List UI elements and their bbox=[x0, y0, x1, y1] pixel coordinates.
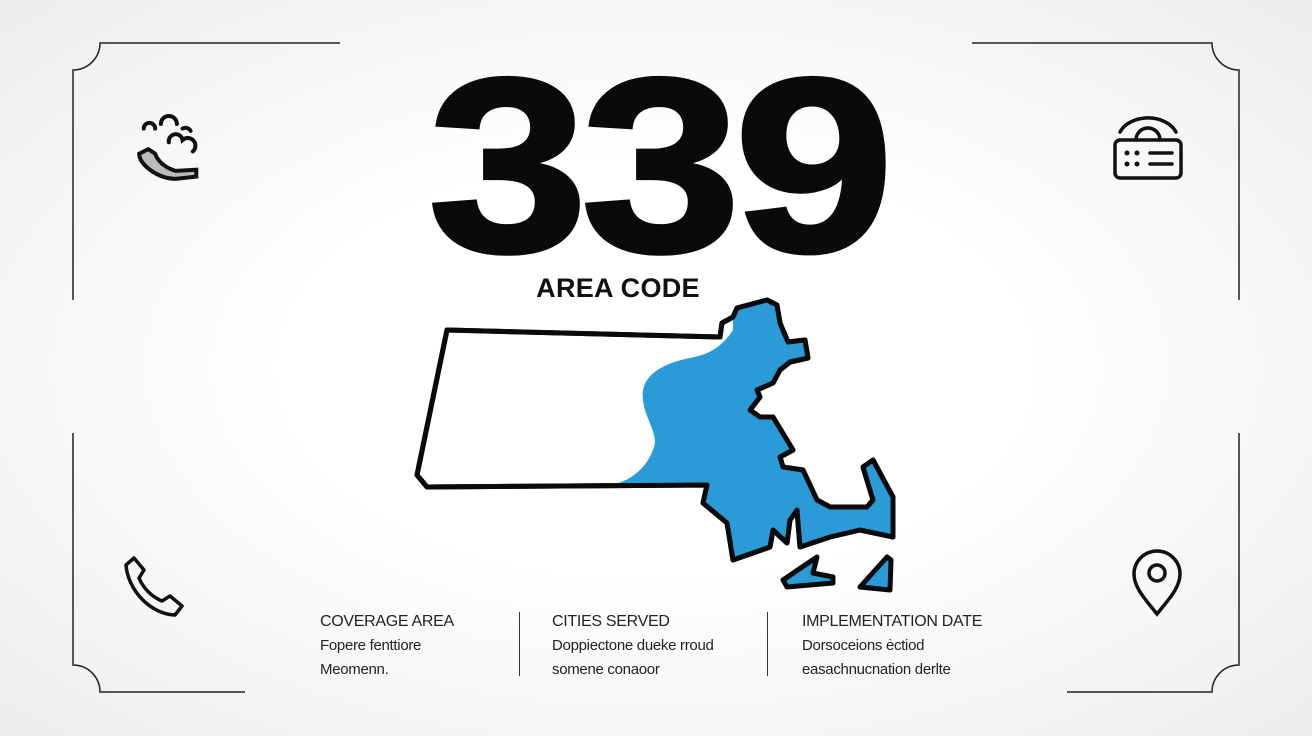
icon: phone with arcs bbox=[137, 114, 198, 181]
subtitle: AREA CODE: AREA CODE bbox=[536, 273, 700, 303]
divider 2 bbox=[767, 612, 768, 676]
text block: implementation date: Dorsoceions ėctiod bbox=[802, 637, 924, 654]
text block: coverage area bbox=[320, 613, 454, 678]
text block: coverage area: COVERAGE AREA bbox=[320, 613, 454, 630]
icon: phone handset bbox=[124, 556, 184, 617]
text block: implementation date: IMPLEMENTATION DATE bbox=[802, 613, 982, 630]
text block: implementation date: easachnucnation derlte bbox=[802, 661, 951, 678]
text block: cities served: somene conaoor bbox=[552, 661, 660, 678]
text block: coverage area: Meomenn. bbox=[320, 661, 388, 678]
title: 339: 339 bbox=[428, 26, 887, 304]
text block: implementation date bbox=[802, 613, 982, 678]
text block: coverage area: Fopere fenttiore bbox=[320, 637, 421, 654]
text block: cities served bbox=[552, 613, 714, 678]
text block: cities served: Doppiectone dueke rroud bbox=[552, 637, 714, 654]
icon: lock keypad bbox=[1113, 116, 1183, 180]
icon: location pin bbox=[1132, 549, 1182, 617]
text block: cities served: CITIES SERVED bbox=[552, 613, 670, 630]
divider 1 bbox=[519, 612, 520, 676]
